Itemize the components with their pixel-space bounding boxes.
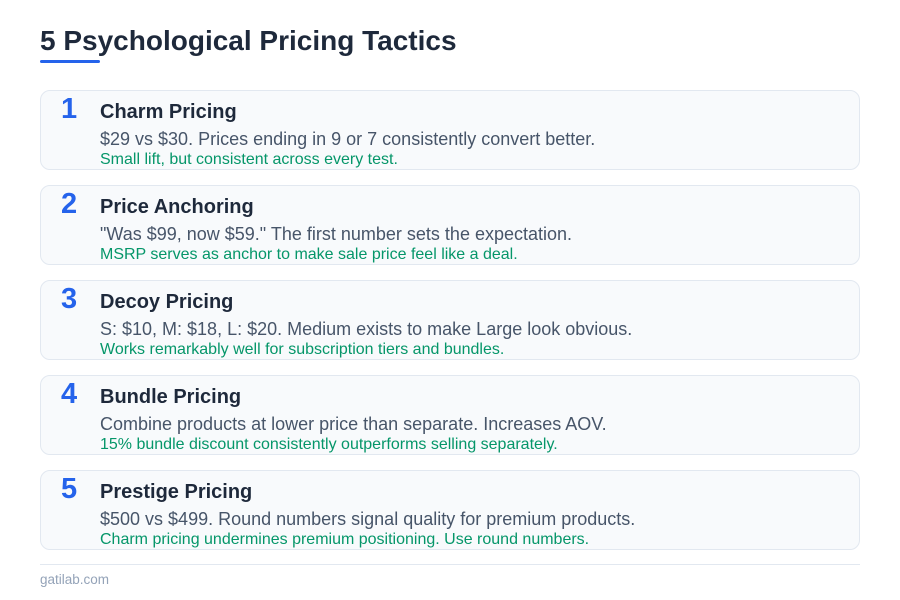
number 2: 2 [61,188,77,220]
note: Small lift, but consistent across every test. [100,151,398,168]
description: S: $10, M: $18, L: $20. Medium exists to make Large look obvious. [100,319,632,339]
heading: Price Anchoring [100,196,254,218]
card 2: price anchoring [40,185,860,265]
heading: Prestige Pricing [100,481,252,503]
footer: gatilab.com [40,572,109,587]
title: 5 Psychological Pricing Tactics [40,25,457,56]
heading: Charm Pricing [100,101,237,123]
title underline [40,60,100,63]
heading: Decoy Pricing [100,291,233,313]
description: $500 vs $499. Round numbers signal quality for premium products. [100,509,635,529]
number 5: 5 [61,473,77,505]
note: MSRP serves as anchor to make sale price feel like a deal. [100,246,518,263]
note: Charm pricing undermines premium positioning. Use round numbers. [100,531,589,548]
card 1: charm pricing [40,90,860,170]
number 4: 4 [61,378,77,410]
heading: Bundle Pricing [100,386,241,408]
description: $29 vs $30. Prices ending in 9 or 7 consistently convert better. [100,129,595,149]
number 1: 1 [61,93,77,125]
note: Works remarkably well for subscription tiers and bundles. [100,341,504,358]
description: Combine products at lower price than separate. Increases AOV. [100,414,607,434]
card 5: prestige pricing [40,470,860,550]
note: 15% bundle discount consistently outperforms selling separately. [100,436,558,453]
card 4: bundle pricing [40,375,860,455]
number 3: 3 [61,283,77,315]
card 3: decoy pricing [40,280,860,360]
description: "Was $99, now $59." The first number sets the expectation. [100,224,572,244]
